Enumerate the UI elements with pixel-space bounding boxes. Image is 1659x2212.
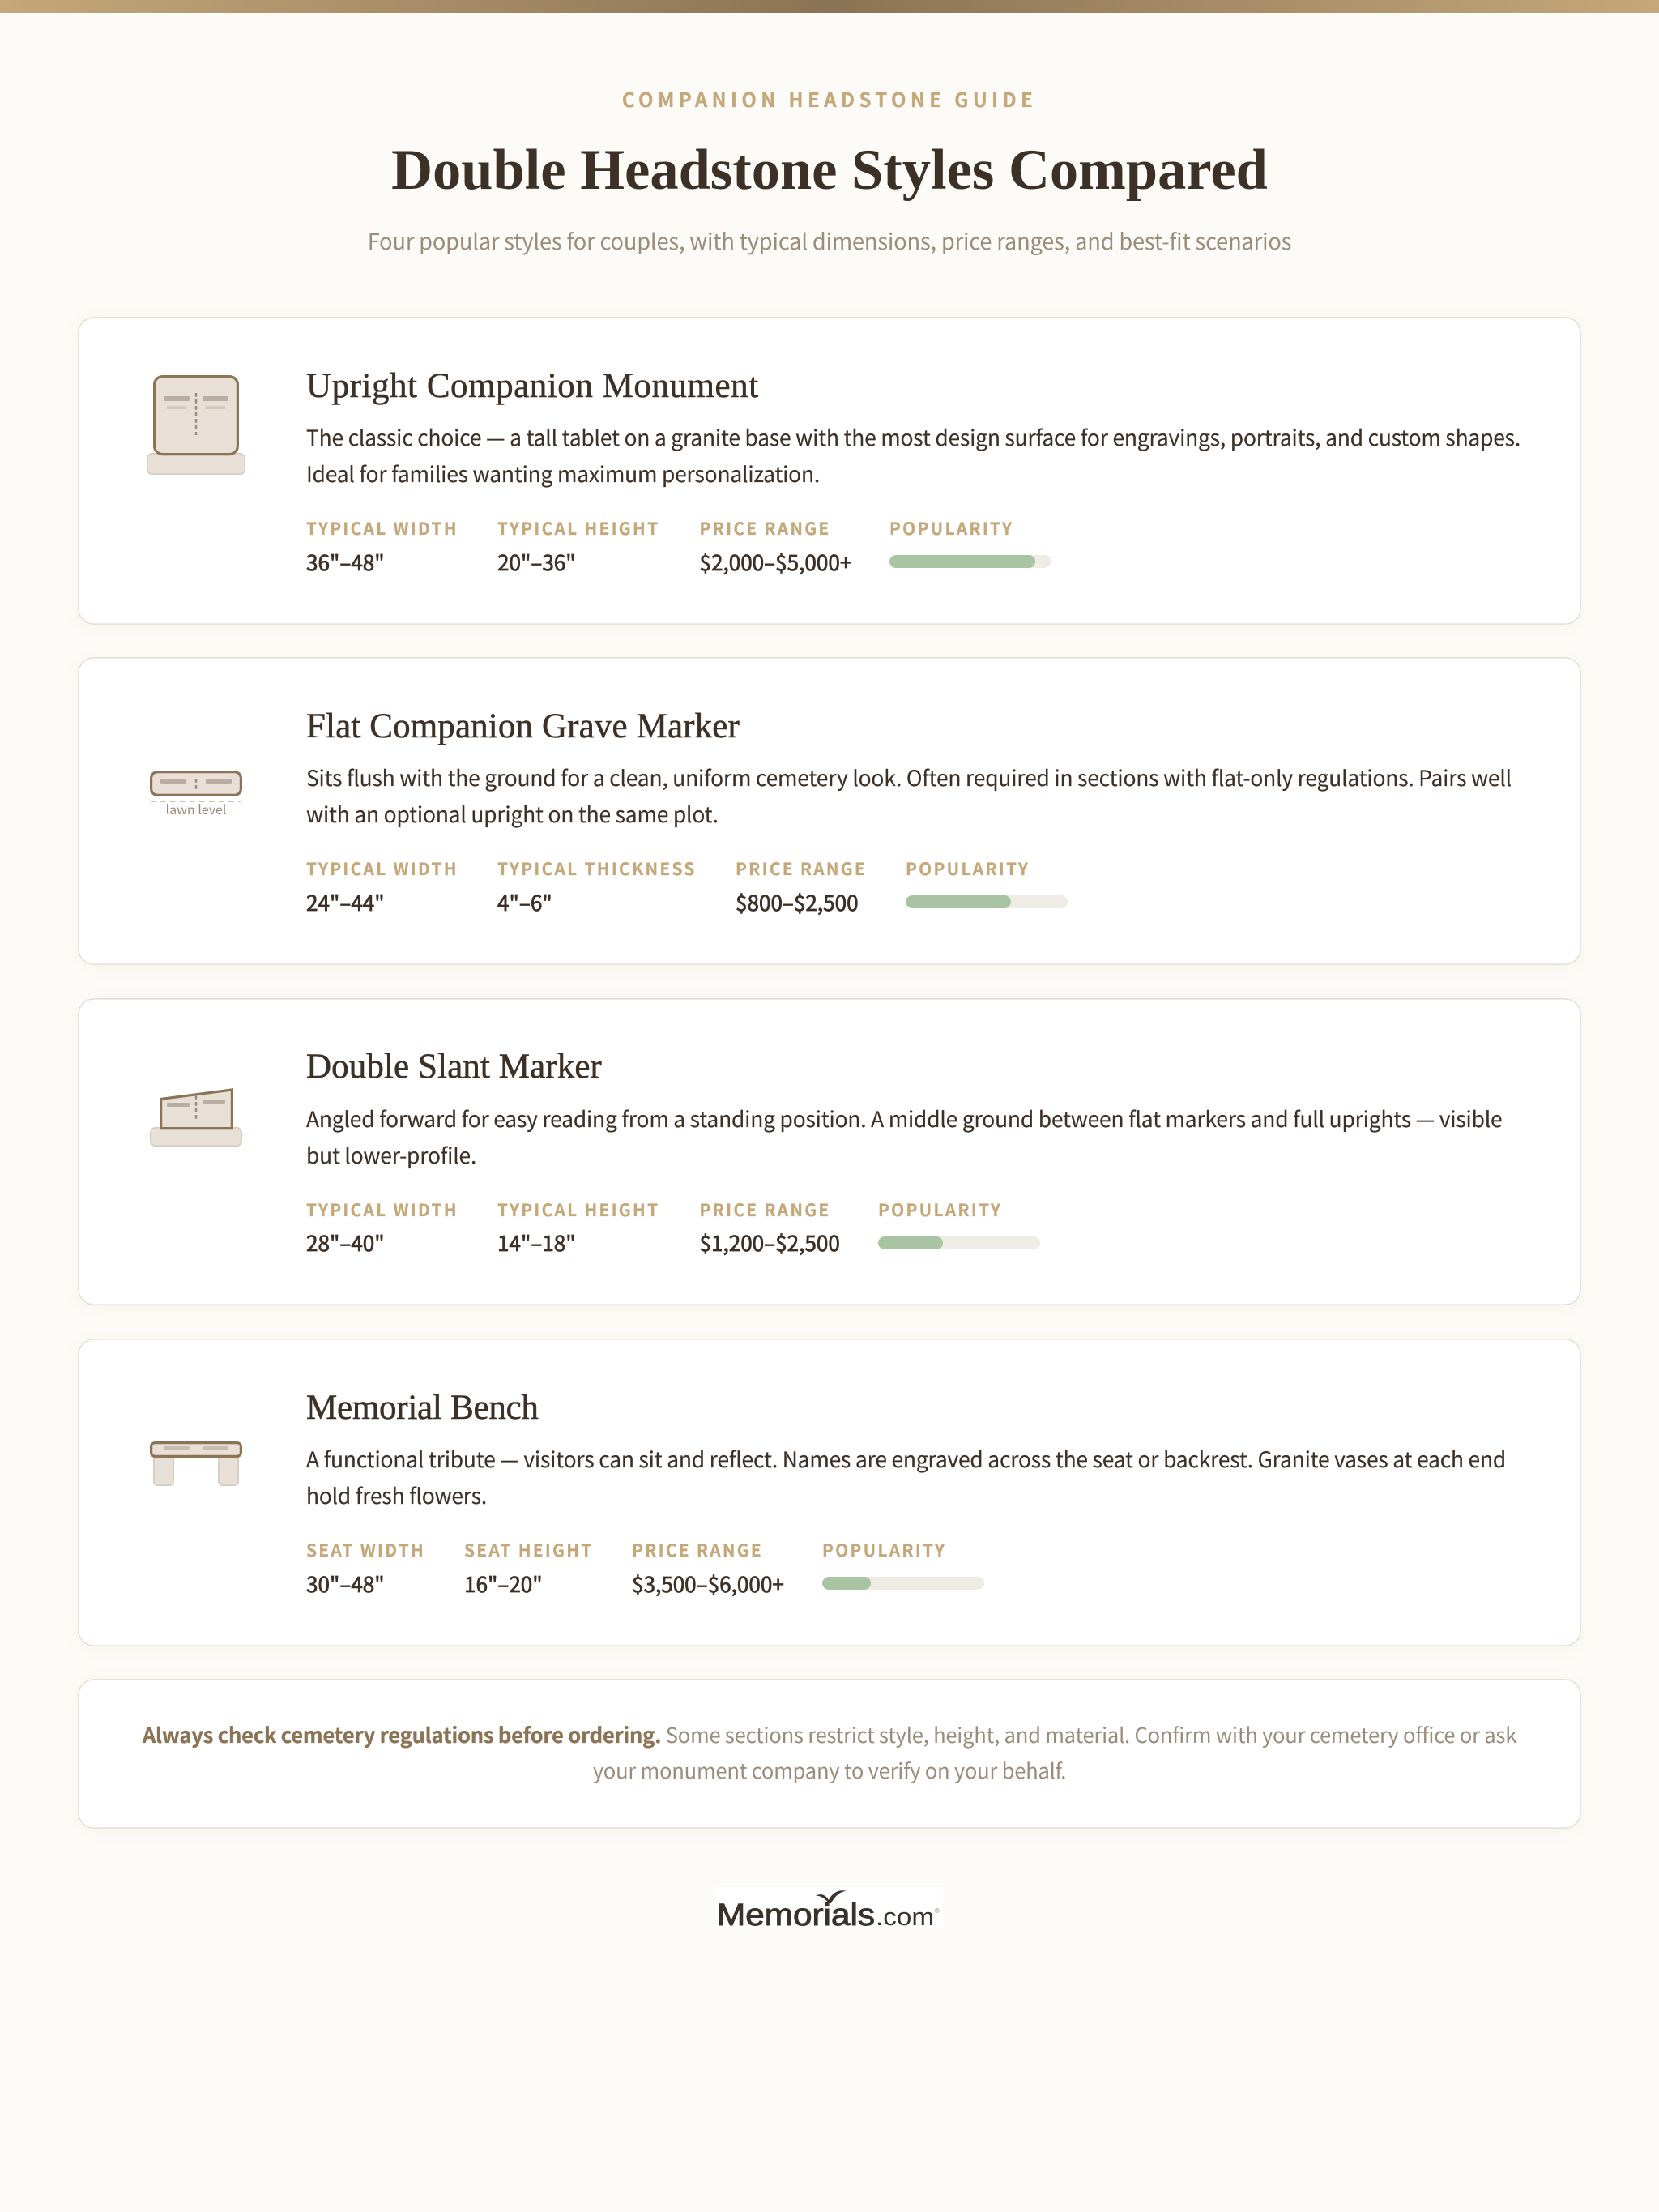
panel: upright companion monument: 36"–48"	[306, 546, 385, 577]
description	[306, 421, 1520, 489]
description: Angled forward for easy reading from a standing position. A middle ground between flat markers and full uprights — visible	[306, 1102, 1502, 1134]
spec: popularity bar	[822, 1537, 984, 1590]
spec: typical width	[306, 856, 458, 917]
description: but lower-profile.	[306, 1138, 476, 1170]
panel: double slant marker: PRICE RANGE	[700, 1197, 831, 1221]
spec: typical width	[306, 1197, 458, 1258]
panel: flat companion grave marker: TYPICAL WIDTH	[306, 856, 458, 880]
spec: popularity bar: POPULARITY	[878, 1197, 1002, 1221]
spec: popularity bar: POPULARITY	[906, 856, 1030, 880]
spec: popularity bar: POPULARITY	[889, 515, 1013, 540]
panel: memorial bench: SEAT HEIGHT	[464, 1537, 594, 1561]
spec: popularity bar	[878, 1197, 1040, 1249]
callout: cemetery regulations: your monument company to verify on your behalf.	[593, 1755, 1066, 1785]
callout: cemetery regulations	[78, 1679, 1581, 1828]
panel: memorial bench	[78, 1339, 1581, 1646]
spec: price range	[632, 1537, 784, 1599]
eyebrow: COMPANION HEADSTONE GUIDE	[622, 84, 1037, 113]
heading: Flat Companion Grave Marker	[306, 707, 740, 745]
icon: upright headstone	[147, 375, 245, 475]
logo: Memorials.com: ®	[935, 1907, 940, 1915]
spec: seat width	[306, 1537, 425, 1599]
top gradient bar	[0, 0, 1659, 13]
panel: memorial bench: 16"–20"	[464, 1568, 543, 1599]
title: Double Headstone Styles Compared	[391, 139, 1268, 202]
spec: typical height	[497, 1197, 659, 1258]
icon: bench	[150, 1441, 242, 1486]
panel: upright companion monument: TYPICAL WIDTH	[306, 515, 458, 540]
description: Ideal for families wanting maximum personalization.	[306, 457, 820, 489]
panel: memorial bench: PRICE RANGE	[632, 1537, 763, 1561]
description	[306, 1442, 1506, 1510]
panel: flat companion grave marker: PRICE RANGE	[736, 856, 867, 880]
panel: upright companion monument: TYPICAL HEIGHT	[497, 515, 659, 540]
spec: typical height	[497, 515, 659, 577]
description: with an optional upright on the same plot.	[306, 797, 719, 829]
spec: typical thickness	[497, 856, 697, 917]
panel: double slant marker: $1,200–$2,500	[700, 1227, 840, 1258]
panel: flat companion grave marker: 24"–44"	[306, 886, 385, 917]
panel: upright companion monument: PRICE RANGE	[700, 515, 831, 540]
logo: Memorials.com	[717, 1890, 940, 1928]
panel: memorial bench: $3,500–$6,000+	[632, 1568, 784, 1599]
callout: cemetery regulations: Always check cemetery regulations before ordering. Some sections restrict style, height, and material. Confirm with your cemetery office or ask	[143, 1719, 1516, 1749]
panel: flat companion grave marker: $800–$2,500	[736, 886, 859, 917]
subtitle: Four popular styles for couples, with typical dimensions, price ranges, and best-fit scenarios	[368, 224, 1291, 256]
description	[306, 1102, 1502, 1170]
spec: seat height	[464, 1537, 594, 1599]
panel: double slant marker	[78, 998, 1581, 1305]
spec: popularity bar	[889, 515, 1051, 568]
panel: upright companion monument	[78, 317, 1581, 625]
icon: flat marker	[150, 771, 242, 818]
panel: double slant marker: TYPICAL WIDTH	[306, 1197, 458, 1221]
panel: flat companion grave marker: TYPICAL THICKNESS	[497, 856, 697, 880]
description	[306, 761, 1512, 829]
spec: price range	[736, 856, 867, 917]
panel: upright companion monument: 20"–36"	[497, 546, 576, 577]
description: The classic choice — a tall tablet on a granite base with the most design surface for engravings, portraits, and custom shapes.	[306, 421, 1520, 452]
panel: memorial bench: SEAT WIDTH	[306, 1537, 425, 1561]
icon: flat marker: lawn level	[166, 799, 226, 818]
panel: upright companion monument: $2,000–$5,000+	[700, 546, 851, 577]
heading: Upright Companion Monument	[306, 366, 759, 405]
spec: popularity bar	[906, 856, 1068, 908]
spec: popularity bar: POPULARITY	[822, 1537, 946, 1561]
icon: slant marker	[150, 1088, 242, 1147]
panel: double slant marker: 14"–18"	[497, 1227, 576, 1258]
panel: flat companion grave marker	[78, 657, 1581, 965]
heading: Double Slant Marker	[306, 1048, 602, 1086]
description: Sits flush with the ground for a clean, uniform cemetery look. Often required in sections with flat-only regulations. Pairs well	[306, 761, 1512, 792]
panel: double slant marker: TYPICAL HEIGHT	[497, 1197, 659, 1221]
spec: price range	[700, 515, 851, 577]
spec: price range	[700, 1197, 840, 1258]
spec: typical width	[306, 515, 458, 577]
panel: flat companion grave marker: 4"–6"	[497, 886, 552, 917]
description: hold fresh flowers.	[306, 1479, 487, 1510]
heading: Memorial Bench	[306, 1389, 539, 1427]
panel: double slant marker: 28"–40"	[306, 1227, 385, 1258]
panel: memorial bench: 30"–48"	[306, 1568, 385, 1599]
description: A functional tribute — visitors can sit and reflect. Names are engraved across the seat or backrest. Granite vases at each end	[306, 1442, 1506, 1474]
